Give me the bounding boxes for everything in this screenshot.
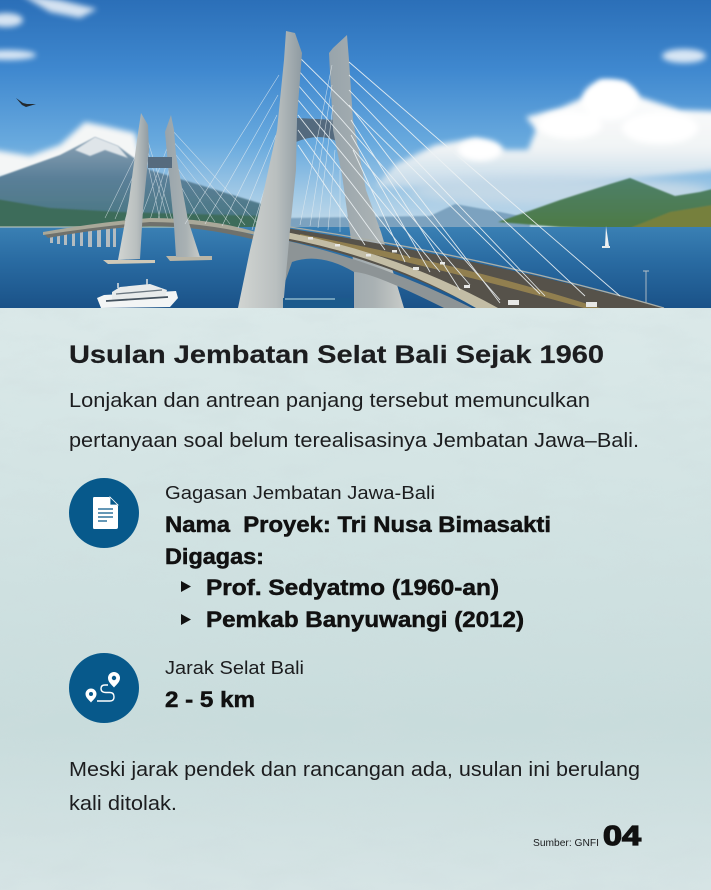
bullet: Prof. Sedyatmo: Prof. Sedyatmo (1960-an)	[206, 575, 499, 600]
ship	[97, 279, 178, 308]
bird	[16, 98, 36, 107]
block: project idea	[165, 483, 551, 632]
sailboat	[602, 226, 610, 248]
hero photo: cable-stayed bridge over the strait	[0, 0, 711, 308]
sky	[0, 0, 711, 232]
intro paragraph: Lonjakan dan antrean panjang tersebut memunculkan	[69, 390, 590, 412]
source note: Sumber: GNFI	[533, 838, 599, 849]
page background: pale water texture	[0, 308, 711, 890]
distant tower cables	[105, 130, 260, 226]
block: project idea: Digagas:	[165, 544, 264, 569]
closing paragraph: kali ditolak.	[69, 793, 177, 815]
far bridge tower	[103, 113, 212, 264]
icon: document	[69, 478, 139, 548]
vehicles	[308, 237, 597, 307]
bullet: Pemkab Banyuwangi: Pemkab Banyuwangi (2012)	[206, 607, 524, 632]
block: project idea: Nama Proyek: Tri Nusa Bimasakti	[165, 512, 551, 537]
far deck with piers	[43, 218, 256, 247]
closing paragraph	[69, 759, 640, 815]
main tower front leg	[238, 31, 335, 308]
icon: route with map pins	[69, 653, 139, 723]
block: strait distance: 2 - 5 km	[165, 687, 255, 712]
clouds	[0, 0, 711, 206]
block: strait distance	[165, 658, 304, 712]
main deck	[284, 227, 664, 308]
intro paragraph: pertanyaan soal belum terealisasinya Jembatan Jawa–Bali.	[69, 430, 639, 452]
main bridge cables	[297, 55, 620, 303]
right hill	[498, 177, 711, 227]
volcano	[0, 137, 262, 228]
page number: 04	[603, 820, 642, 851]
block: project idea: Gagasan Jembatan Jawa-Bali	[165, 483, 435, 503]
block: strait distance: Jarak Selat Bali	[165, 658, 304, 678]
closing paragraph: Meski jarak pendek dan rancangan ada, usulan ini berulang	[69, 759, 640, 781]
lamp post	[643, 271, 649, 306]
distant hills	[290, 204, 530, 228]
sea	[0, 227, 711, 308]
intro paragraph	[69, 390, 639, 452]
main tower rear leg and crossbeam	[296, 35, 404, 308]
title: Usulan Jembatan Selat Bali Sejak 1960	[69, 341, 604, 369]
